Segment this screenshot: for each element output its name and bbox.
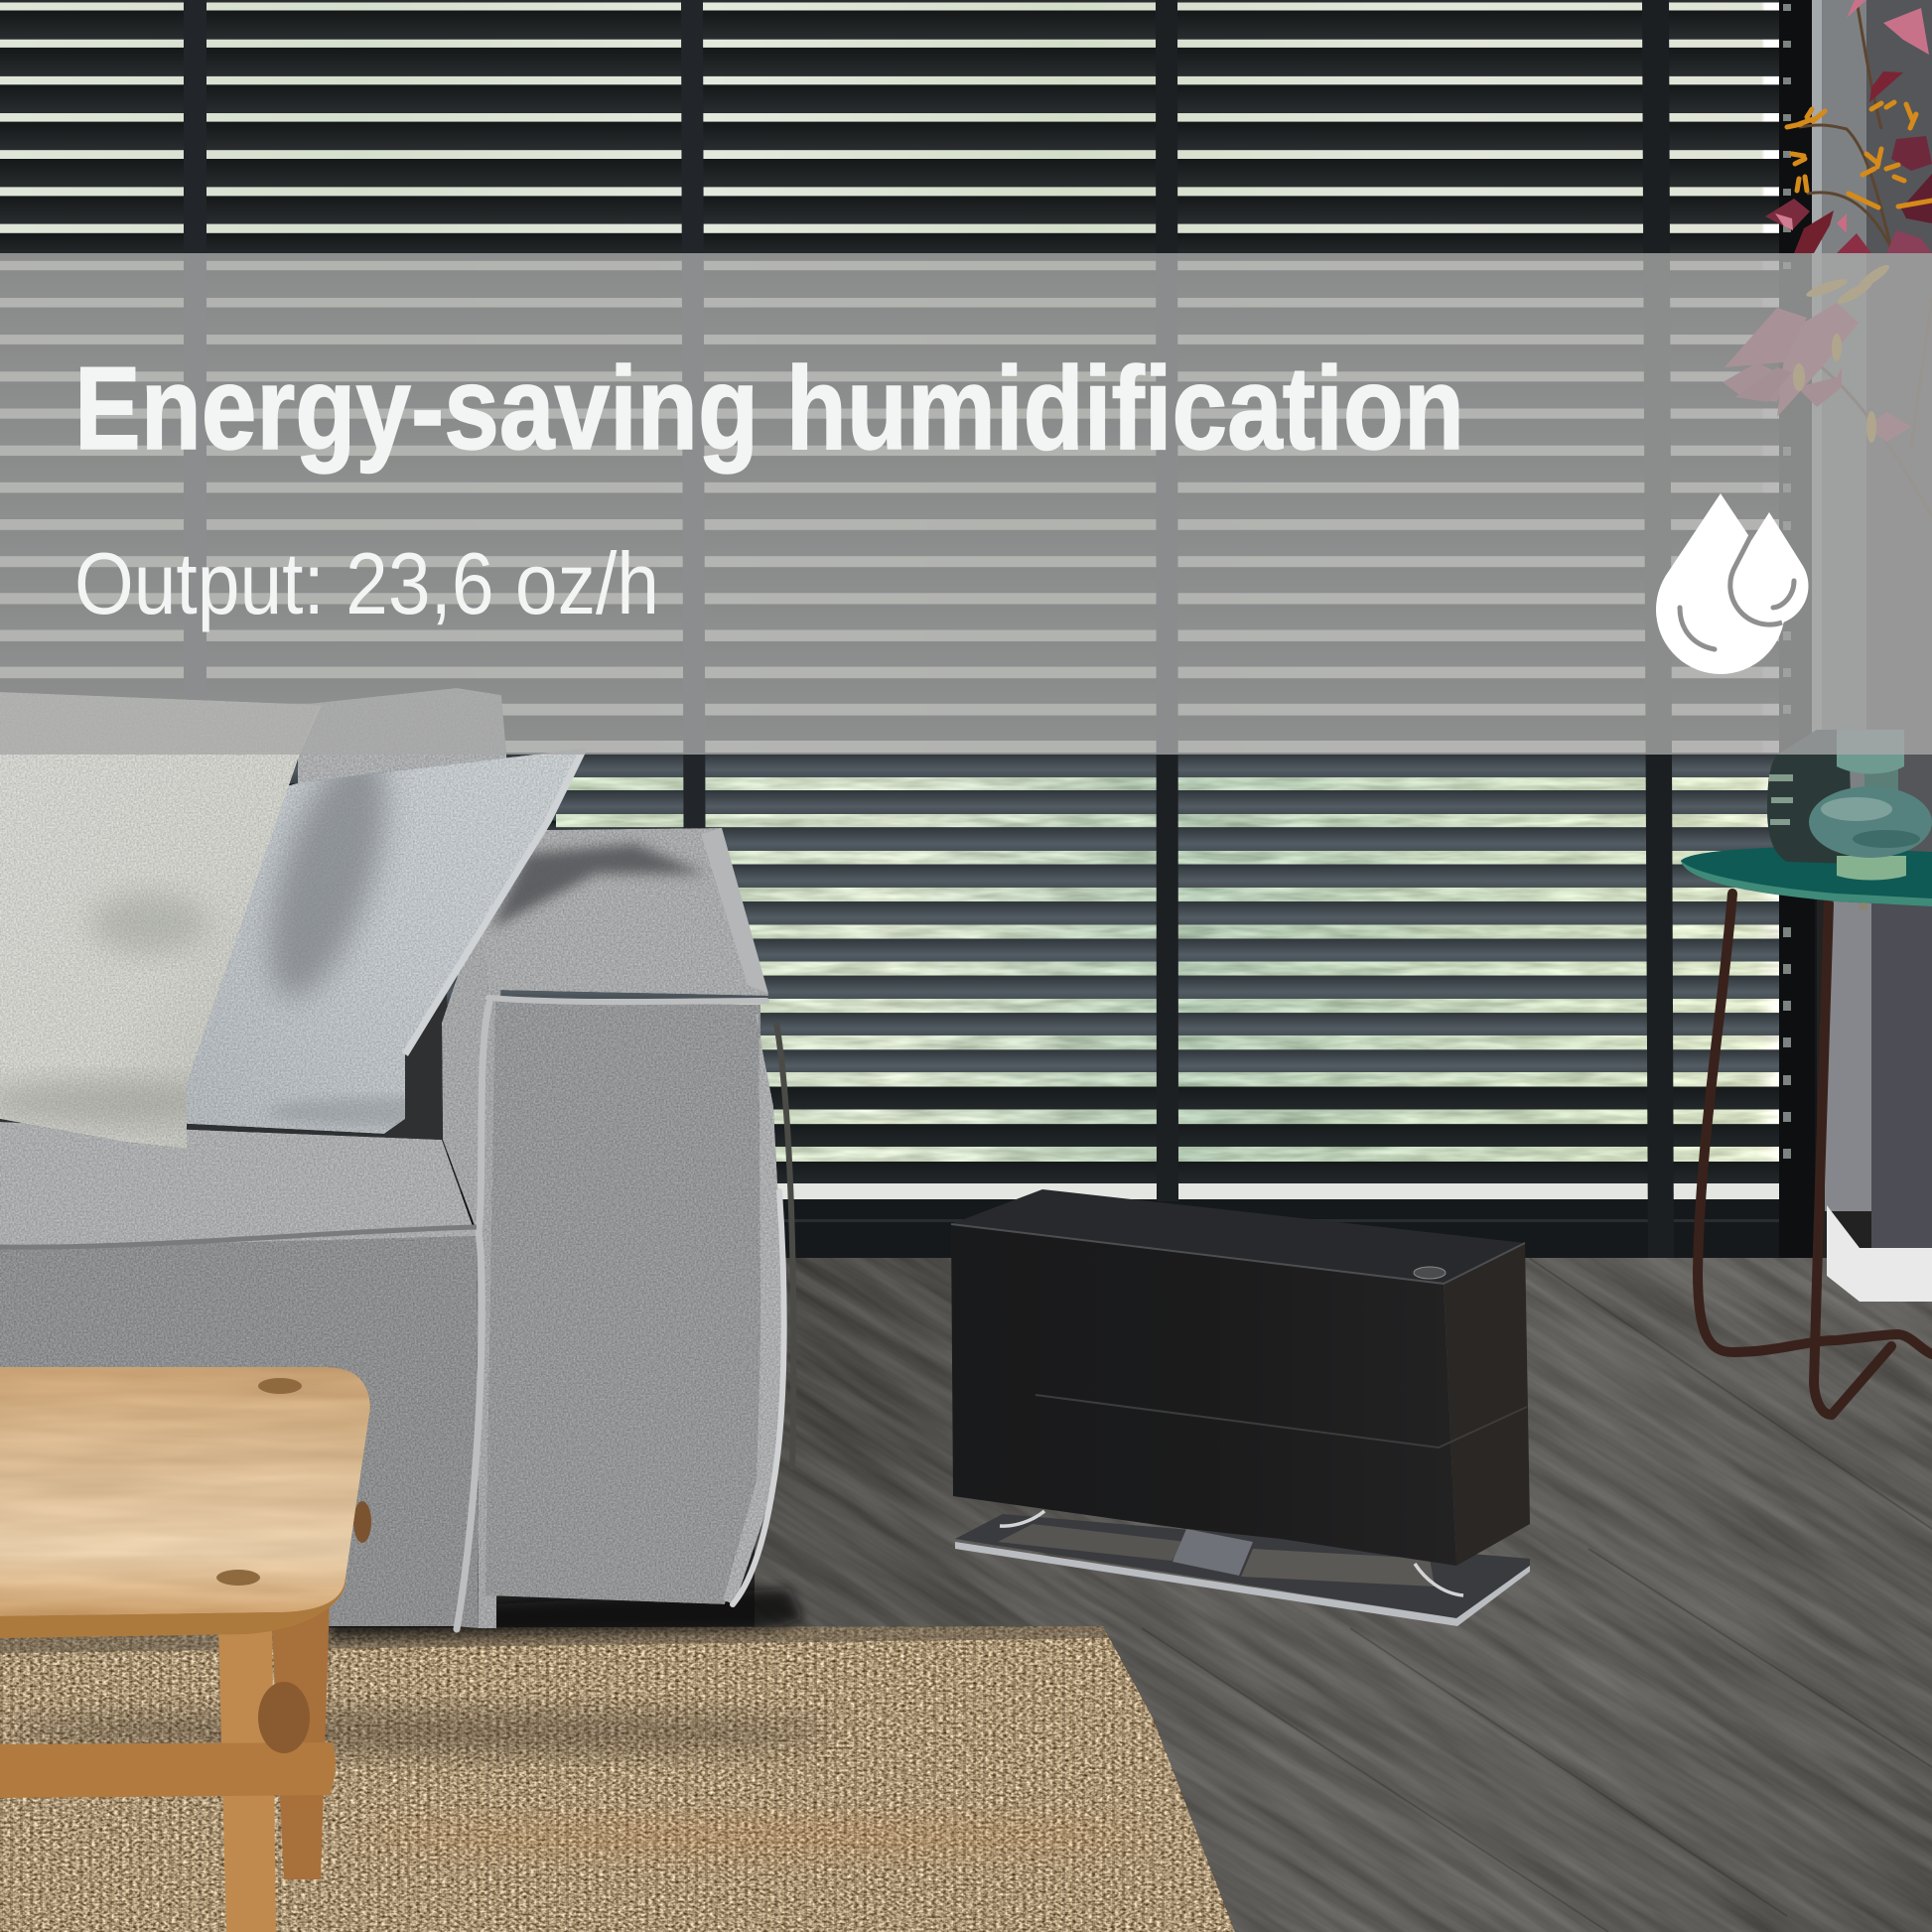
seat back behind pillows [0,794,447,1152]
arm side strip behind flange [776,1023,793,1469]
slat light gaps, upper [0,2,1779,753]
humidifier [951,1189,1530,1626]
centre stand [1173,1529,1253,1576]
window blinds background [0,0,1817,1261]
side table with vases [1681,730,1932,1415]
front leg [218,1628,276,1932]
small slat ends at the window edge [1783,4,1791,1159]
arm front [485,1001,762,1604]
seat holes [216,1378,302,1586]
body side [1444,1243,1530,1566]
seat piping [0,1227,477,1247]
blind ladder tapes [184,0,1674,1259]
dried flowers [1723,0,1932,516]
back leg [272,1598,330,1879]
body front [951,1224,1456,1566]
clear vase [1767,730,1853,864]
jute rug [0,1626,1235,1932]
marble table top [1681,847,1932,910]
knob [258,1682,310,1753]
curved feet [1000,1511,1463,1595]
sofa shadow on floor [328,1588,804,1638]
side knob [353,1501,371,1543]
control dial [1414,1267,1446,1279]
translucent text band [0,253,1932,755]
metal base plate [955,1514,1530,1626]
seam line [1035,1395,1527,1448]
subtitle: output: Output: 23,6 oz/h [74,534,659,632]
arm piping [457,998,784,1629]
wood floor [755,1258,1932,1932]
pillow: off-white [0,692,322,1149]
seat cushion [0,1122,479,1249]
slat light gaps, lower with foliage [556,777,1779,1162]
seat front [0,1227,479,1628]
title: Energy-saving humidification [74,343,1464,475]
grey sofa [0,688,804,1638]
seat top [0,1367,370,1616]
arm side panel [442,913,501,1628]
pillow: blue-grey [169,737,584,1134]
cross bar [0,1742,336,1798]
seat edge [0,1579,345,1638]
arm flange [723,1013,786,1604]
table legs [1698,894,1932,1415]
body top [951,1189,1525,1283]
green glass vase [1809,730,1932,880]
back cushion [298,688,508,804]
window sill light strip [556,1183,1779,1199]
right wall and baseboard [1812,0,1932,1302]
icon: water drops [1656,493,1809,674]
wooden stool [0,1367,371,1932]
arm top [478,828,768,996]
